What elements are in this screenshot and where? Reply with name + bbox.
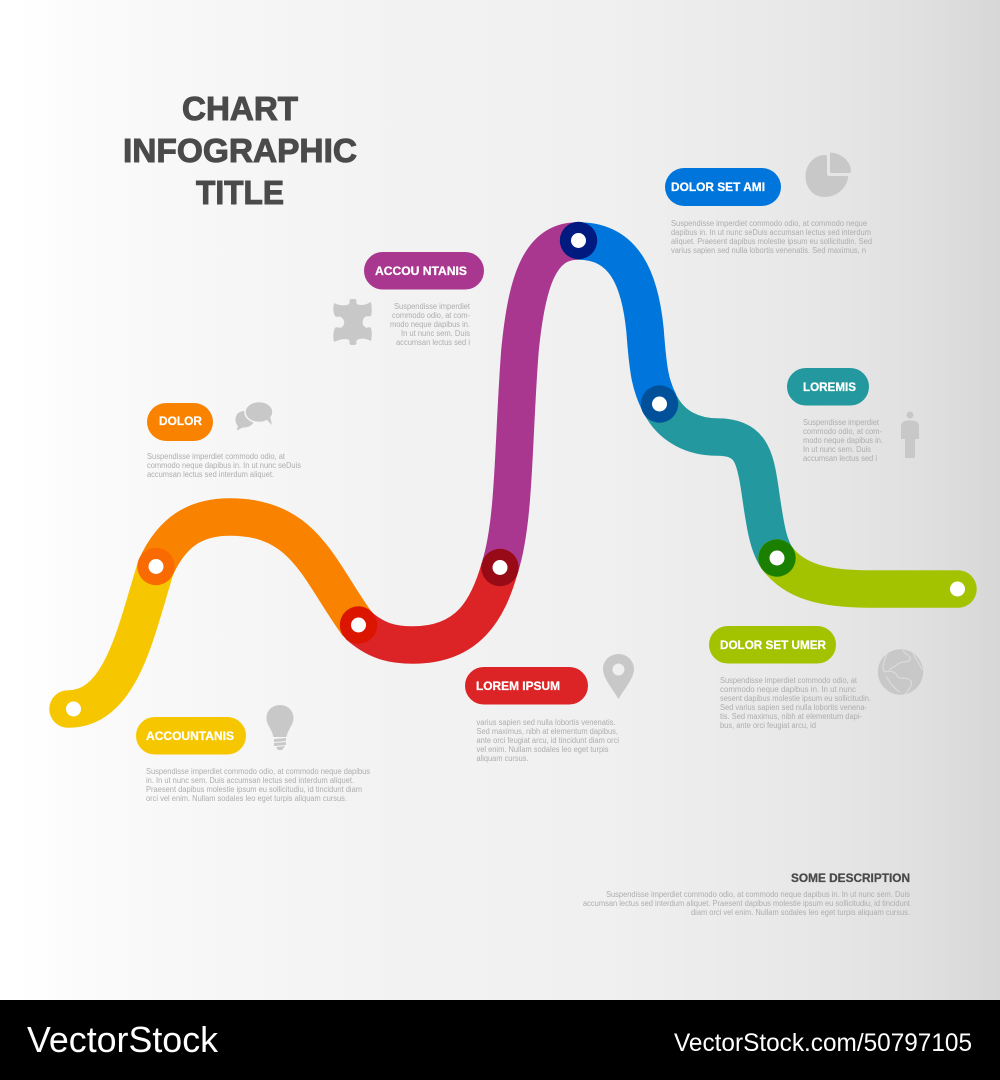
text: accou ntanis: Suspendisse imperdiet <box>394 302 471 311</box>
icon: chat bubbles <box>236 402 273 430</box>
pill: dolor set ami <box>665 168 781 206</box>
icon: globe <box>878 649 923 695</box>
text: accou ntanis: accumsan lectus sed i <box>396 338 470 347</box>
text: loremis: commodo odio, at com- <box>803 427 882 436</box>
ribbon segment: red <box>358 567 500 645</box>
text: accou ntanis: modo neque dapibus in. <box>390 320 470 329</box>
footer logo: VectorStock <box>27 1019 219 1060</box>
start dot <box>66 702 81 716</box>
text: dolor set ami: Suspendisse imperdiet commodo odio, at commodo neque <box>671 219 868 228</box>
text: description: diam orci vel enim. Nullam sodales leo eget turpis aliquam cursus. <box>691 908 910 917</box>
ribbon segment: blue <box>578 241 660 404</box>
text: loremis <box>803 418 883 463</box>
panel: loremis <box>787 368 919 463</box>
pill: accountanis <box>136 717 246 754</box>
text: loremis: modo neque dapibus in. <box>803 436 883 445</box>
title: TITLE <box>196 174 284 211</box>
ribbon segment: green <box>777 558 958 589</box>
text: loremis: Suspendisse imperdiet <box>803 418 880 427</box>
text: accountanis: in. In ut nunc sem. Duis accumsan lectus sed interdum aliquet. <box>146 776 354 785</box>
end dot <box>950 582 965 596</box>
node: navy <box>560 222 597 259</box>
text: dolor: Suspendisse imperdiet commodo odio, at <box>147 452 286 461</box>
text: dolor set umer: Suspendisse imperdiet commodo odio, at <box>720 676 858 685</box>
pill: dolor set umer <box>709 626 836 664</box>
text: lorem ipsum: varius sapien sed nulla lobortis venenatis. <box>476 718 616 727</box>
text: accou ntanis: commodo odio, at com- <box>392 311 470 320</box>
text: loremis: accumsan lectus sed i <box>803 454 877 463</box>
text: lorem ipsum: Sed maximus, nibh at elementum dapibus, <box>476 727 618 736</box>
pill: dolor: DOLOR <box>159 414 202 428</box>
panel: accou ntanis <box>333 252 484 347</box>
text: accou ntanis <box>390 302 471 347</box>
text: loremis: In ut nunc sem. Duis <box>803 445 871 454</box>
icon: puzzle piece <box>333 299 372 345</box>
text: dolor: accumsan lectus sed interdum aliquet. <box>147 470 274 479</box>
text: accou ntanis: In ut nunc sem. Duis <box>401 329 470 338</box>
pill: dolor <box>147 403 213 441</box>
title <box>123 90 357 211</box>
footer url: VectorStock.com/50797105 <box>674 1029 972 1057</box>
text: dolor set ami <box>671 219 872 255</box>
description block <box>583 873 911 917</box>
title: CHART <box>182 90 298 127</box>
node: dark red <box>481 549 519 586</box>
text: dolor <box>147 452 301 479</box>
panel: dolor <box>147 402 301 479</box>
panel: lorem ipsum <box>465 654 634 763</box>
icon: pie chart <box>806 152 851 197</box>
text: lorem ipsum <box>476 718 619 763</box>
ribbon segment: teal <box>660 404 777 558</box>
icon: map pin <box>603 654 634 699</box>
text: dolor set umer: bus, ante orci feugiat arcu, id <box>720 721 816 730</box>
icon: light bulb <box>266 705 294 750</box>
text: dolor set umer: sesent dapibus molestie ipsum eu sollicitudin. <box>720 694 871 703</box>
text: accountanis <box>146 767 370 803</box>
ribbon segment: orange <box>156 517 358 625</box>
text: dolor set ami: varius sapien sed nulla lobortis venenatis. Sed maximus, n <box>671 246 866 255</box>
pill: lorem ipsum <box>465 667 588 704</box>
text: accountanis: Suspendisse imperdiet commodo odio, at commodo neque dapibus <box>146 767 370 776</box>
pill: accou ntanis: ACCOU NTANIS <box>375 264 467 278</box>
ribbon segment: yellow <box>68 567 156 709</box>
text: description: accumsan lectus sed interdum aliquet. Praesent dapibus molestie ipsum eu sollicitudiu, id tincidunt <box>583 899 911 908</box>
pill: accou ntanis <box>364 252 484 290</box>
heading: some description: SOME DESCRIPTION <box>791 873 910 885</box>
text: dolor set umer: tis. Sed maximus, nibh at elementum dapi- <box>720 712 862 721</box>
pill: lorem ipsum: LOREM IPSUM <box>476 679 560 693</box>
text: lorem ipsum: ante orci feugiat arcu, id tincidunt diam orci <box>476 736 619 745</box>
ribbon segment: purple <box>500 241 578 567</box>
pill: dolor set umer: DOLOR SET UMER <box>720 638 826 652</box>
text: dolor set umer: commodo neque dapibus in. In ut nunc <box>720 685 856 694</box>
footer bar <box>0 1000 1000 1080</box>
panel: accountanis <box>136 705 370 803</box>
node: orange <box>137 548 175 585</box>
text: accountanis: Praesent dapibus molestie ipsum eu sollicitudiu, id tincidunt diam <box>146 785 362 794</box>
node: red <box>340 606 377 644</box>
text: dolor set ami: aliquet. Praesent dapibus molestie ipsum eu sollicitudin. Sed <box>671 237 872 246</box>
text: description <box>583 890 911 917</box>
panel: dolor set ami <box>665 152 872 255</box>
ribbon chart <box>66 222 965 717</box>
text: lorem ipsum: aliquam cursus. <box>476 754 528 763</box>
pill: loremis: LOREMIS <box>803 380 856 394</box>
text: lorem ipsum: vel enim. Nullam sodales leo eget turpis <box>476 745 608 754</box>
text: dolor set umer: Sed varius sapien sed nulla lobortis venena- <box>720 703 867 712</box>
pill: dolor set ami: DOLOR SET AMI <box>671 180 765 194</box>
icon: person <box>901 412 919 458</box>
text: description: Suspendisse imperdiet commodo odio, at commodo neque dapibus in. In ut nunc sem. Duis <box>606 890 910 899</box>
text: accountanis: orci vel enim. Nullam sodales leo eget turpis aliquam cursus. <box>146 794 347 803</box>
node: dark blue <box>641 385 678 423</box>
text: dolor set umer <box>720 676 871 730</box>
pill: accountanis: ACCOUNTANIS <box>146 729 234 743</box>
text: dolor set ami: dapibus in. In ut nunc seDuis accumsan lectus sed interdum <box>671 228 871 237</box>
panel: dolor set umer <box>709 626 923 730</box>
title: INFOGRAPHIC <box>123 132 357 169</box>
node: green <box>758 539 796 577</box>
text: dolor: commodo neque dapibus in. In ut nunc seDuis <box>147 461 301 470</box>
